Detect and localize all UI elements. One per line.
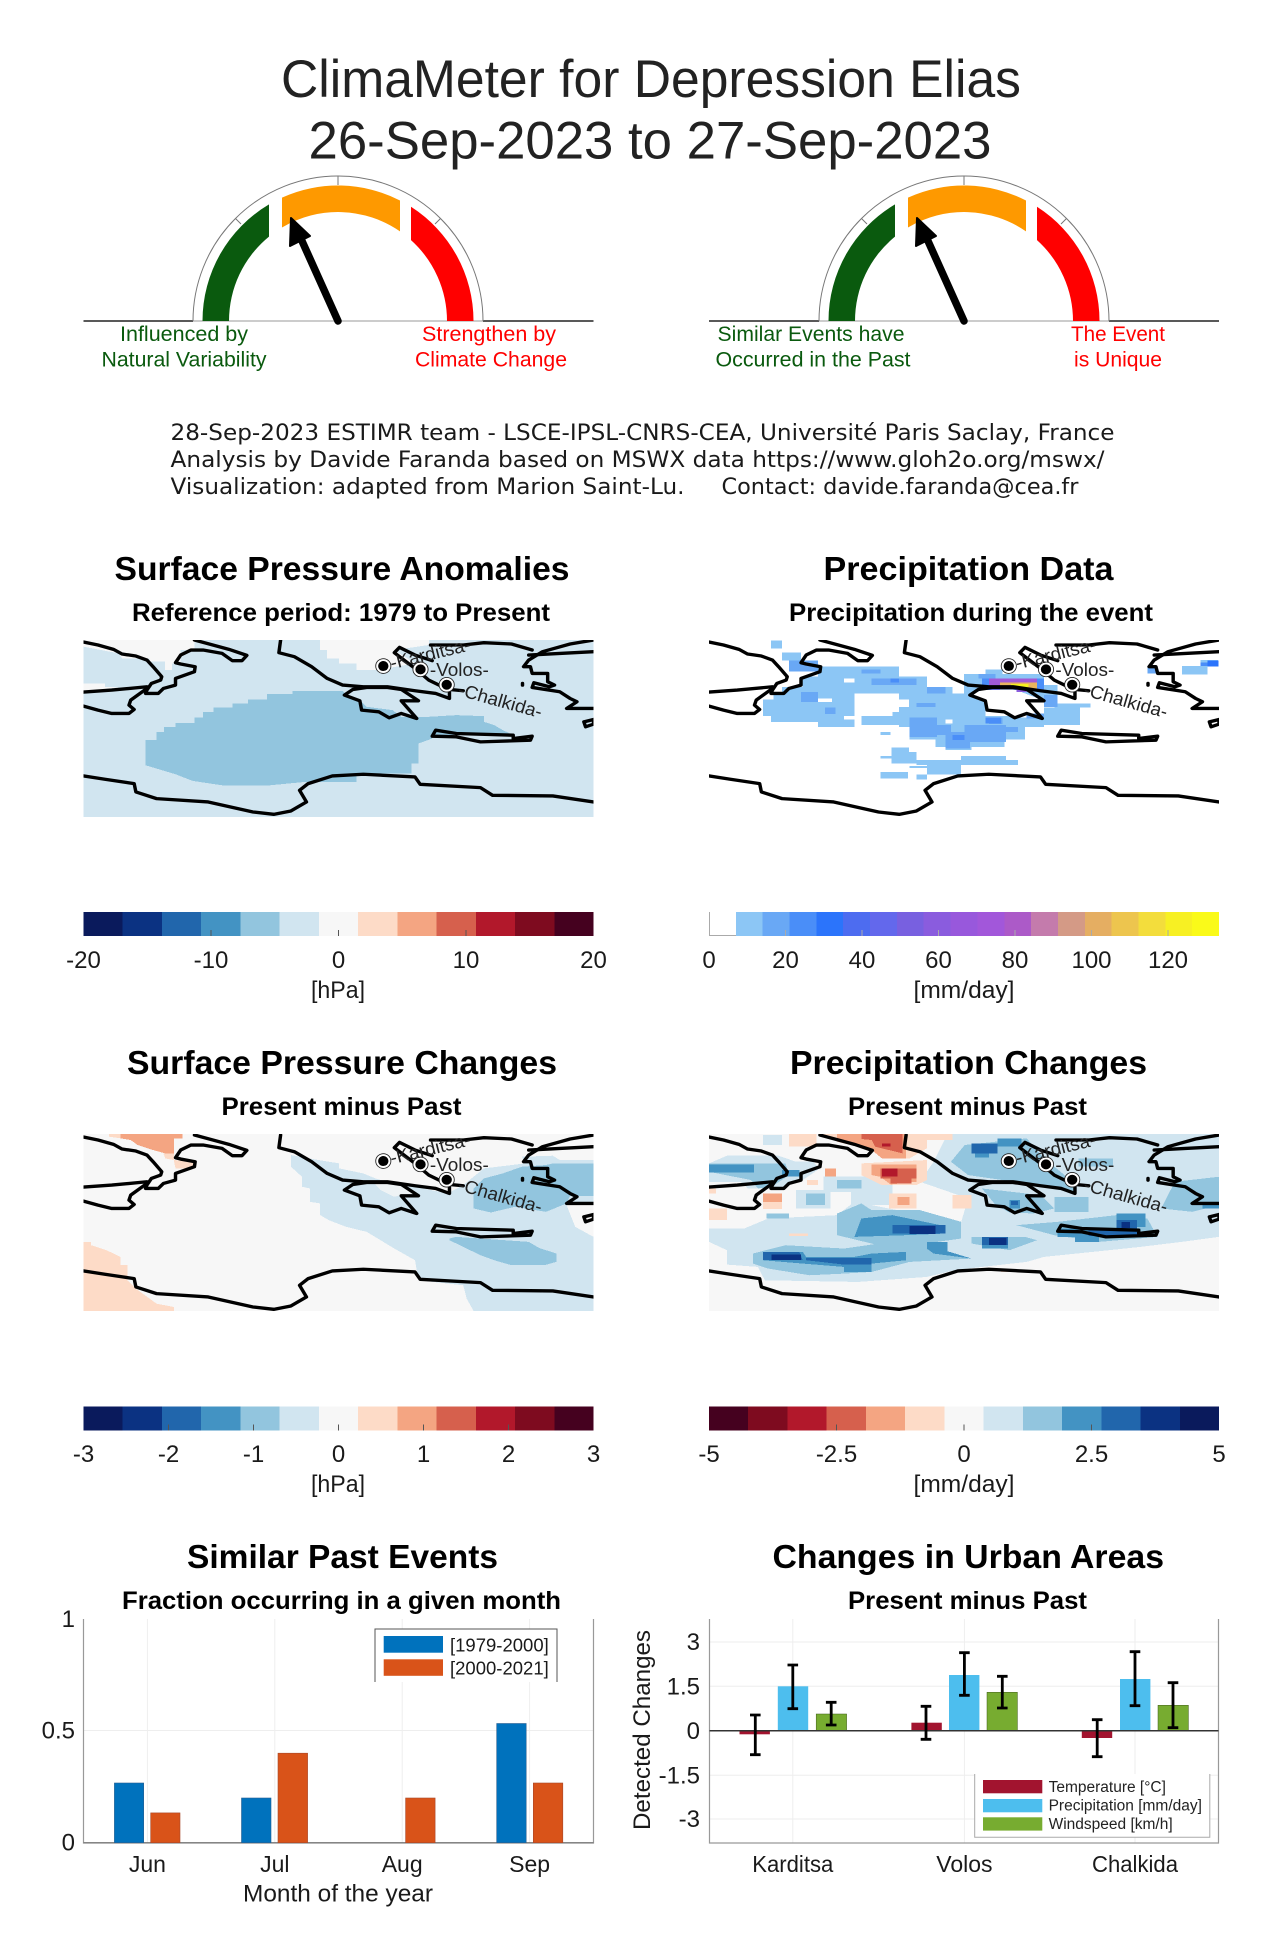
error bars [750,1652,1178,1757]
panel: changes in urban areas [629,1538,1218,1877]
arrow: gauge needle [916,218,964,321]
colorbar labels: 0 [332,1441,345,1468]
map: pressure anomalies: -Volos- [430,659,489,680]
colorbar: mm/day [736,912,1219,936]
y axis labels: 1.5 [667,1674,700,1700]
colorbar labels: 0 [957,1441,971,1468]
map: precipitation [709,634,1219,816]
colorbar labels [702,947,1188,1004]
y axis labels: -3 [679,1806,700,1833]
colorbar labels: 2 [502,1441,515,1468]
title: ClimaMeter for Depression Elias [281,50,1021,109]
x axis labels [752,1851,1178,1877]
map: pressure anomalies [84,634,594,817]
right gauge labels: Similar Events have [718,322,904,346]
subheading: Reference period: 1979 to Present [132,599,551,627]
colorbar labels: 2.5 [1075,1441,1108,1468]
title [281,50,1021,170]
y axis labels: 1 [62,1606,75,1633]
map: precipitation changes [709,1129,1219,1311]
y axis labels: -1.5 [659,1762,700,1790]
legend [975,1774,1210,1837]
colorbar labels: 100 [1071,947,1112,974]
credits text block: 28-Sep-2023 ESTIMR team - LSCE-IPSL-CNRS-CEA, Université Paris Saclay, France [170,421,1114,446]
colorbar labels: 20 [772,947,799,974]
right gauge labels: Occurred in the Past [716,348,911,372]
left gauge labels: Natural Variability [102,348,267,372]
credits text block: Contact: davide.faranda@cea.fr [722,475,1079,500]
gauge: natural variability vs climate change [84,176,594,372]
x axis labels: Chalkida [1092,1851,1178,1877]
colorbar labels: 80 [1002,947,1028,974]
arrow: gauge needle [290,218,338,321]
left gauge labels: Climate Change [415,348,567,372]
colorbar labels [66,947,607,1004]
x axis labels [129,1851,550,1908]
map: precipitation: -Karditsa- [1013,634,1098,673]
colorbar labels: 20 [580,947,607,974]
colorbar labels: 0 [702,947,716,974]
title: 26-Sep-2023 to 27-Sep-2023 [308,112,992,170]
heading: Changes in Urban Areas [772,1538,1164,1575]
colorbar labels: 40 [849,947,875,974]
map: pressure changes: -Chalkida- [456,1174,545,1217]
map: precipitation changes: -Chalkida- [1081,1174,1170,1217]
map: pressure anomalies: -Karditsa- [388,634,473,673]
right gauge labels: The Event [1071,322,1165,346]
x axis labels: Aug [382,1851,423,1877]
legend: Temperature [°C] [1049,1779,1166,1796]
map: precipitation changes: -Volos- [1055,1154,1114,1175]
map: pressure changes: -Volos- [430,1154,489,1175]
panel: precipitation data [702,550,1219,1004]
y axis labels: 3 [687,1629,700,1656]
y axis labels: 0 [687,1718,700,1745]
legend: Windspeed [km/h] [1049,1816,1173,1833]
map: pressure changes [84,1129,594,1311]
y axis title: Detected Changes [629,1630,656,1830]
colorbar labels: 5 [1212,1441,1226,1468]
right gauge labels: is Unique [1074,348,1162,372]
colorbar labels: [hPa] [311,1471,365,1498]
heading: Surface Pressure Changes [127,1044,557,1081]
colorbar labels: -5 [698,1441,720,1468]
colorbar: hPa [84,912,594,936]
x axis labels: Jul [260,1851,290,1877]
x axis labels: Month of the year [243,1880,433,1908]
colorbar labels: [hPa] [311,977,365,1004]
colorbar labels: [mm/day] [914,977,1014,1004]
colorbar labels: 1 [417,1441,430,1468]
colorbar labels: 3 [587,1441,600,1468]
left gauge labels: Influenced by [120,322,248,346]
subheading: Present minus Past [848,1587,1088,1615]
map: precipitation changes: -Karditsa- [1013,1129,1098,1168]
legend: [1979-2000] [450,1634,549,1656]
heading: Precipitation Data [824,550,1114,587]
bar chart: cities [629,1619,1218,1877]
colorbar labels: -1 [243,1441,264,1468]
credits text block: Analysis by Davide Faranda based on MSWX data https://www.gloh2o.org/mswx/ [170,448,1105,473]
colorbar labels: 60 [925,947,952,974]
map: pressure anomalies: -Chalkida- [456,679,545,722]
colorbar labels: [mm/day] [914,1471,1014,1498]
y axis labels: 0.5 [42,1718,75,1744]
panel: similar past events [42,1538,594,1908]
subheading: Present minus Past [222,1093,462,1121]
legend: [2000-2021] [450,1658,549,1678]
subheading: Precipitation during the event [789,599,1154,627]
panel: precipitation changes [698,1044,1226,1498]
colorbar labels: -10 [194,947,228,974]
colorbar labels: -3 [73,1441,94,1468]
map: pressure changes: -Karditsa- [388,1129,473,1168]
y axis labels [42,1606,75,1856]
heading: Precipitation Changes [790,1044,1147,1081]
map: precipitation: -Chalkida- [1081,679,1170,722]
map: precipitation: -Volos- [1055,659,1114,680]
panel: surface pressure changes [73,1044,600,1498]
y axis labels: 0 [62,1830,75,1856]
legend [375,1629,557,1682]
colorbar: mm/day [709,1406,1219,1430]
credits text block [170,421,1114,500]
left gauge labels: Strengthen by [422,322,556,346]
heading: Surface Pressure Anomalies [114,550,570,587]
colorbar labels: 0 [332,947,345,974]
panel: surface pressure anomalies [66,550,607,1004]
subheading: Present minus Past [848,1093,1088,1121]
x axis labels: Karditsa [752,1851,833,1877]
subheading: Fraction occurring in a given month [122,1587,561,1615]
x axis labels: Volos [936,1851,993,1877]
colorbar: hPa [84,1406,594,1430]
colorbar labels [698,1441,1226,1498]
gauge: past events vs unique event [709,176,1219,372]
x axis labels: Sep [509,1851,550,1877]
colorbar labels: -2.5 [816,1441,857,1468]
colorbar labels [73,1441,600,1498]
colorbar labels: 120 [1148,947,1188,974]
y axis labels [659,1629,700,1833]
heading: Similar Past Events [187,1538,498,1575]
colorbar labels: -2 [158,1441,179,1468]
colorbar labels: 10 [453,947,479,974]
credits text block: Visualization: adapted from Marion Saint-Lu. [170,475,684,500]
right gauge labels [716,322,1165,372]
legend: Precipitation [mm/day] [1049,1798,1202,1814]
bar chart: months [42,1606,594,1908]
colorbar labels: -20 [66,947,101,974]
left gauge labels [102,322,567,372]
x axis labels: Jun [129,1851,166,1877]
